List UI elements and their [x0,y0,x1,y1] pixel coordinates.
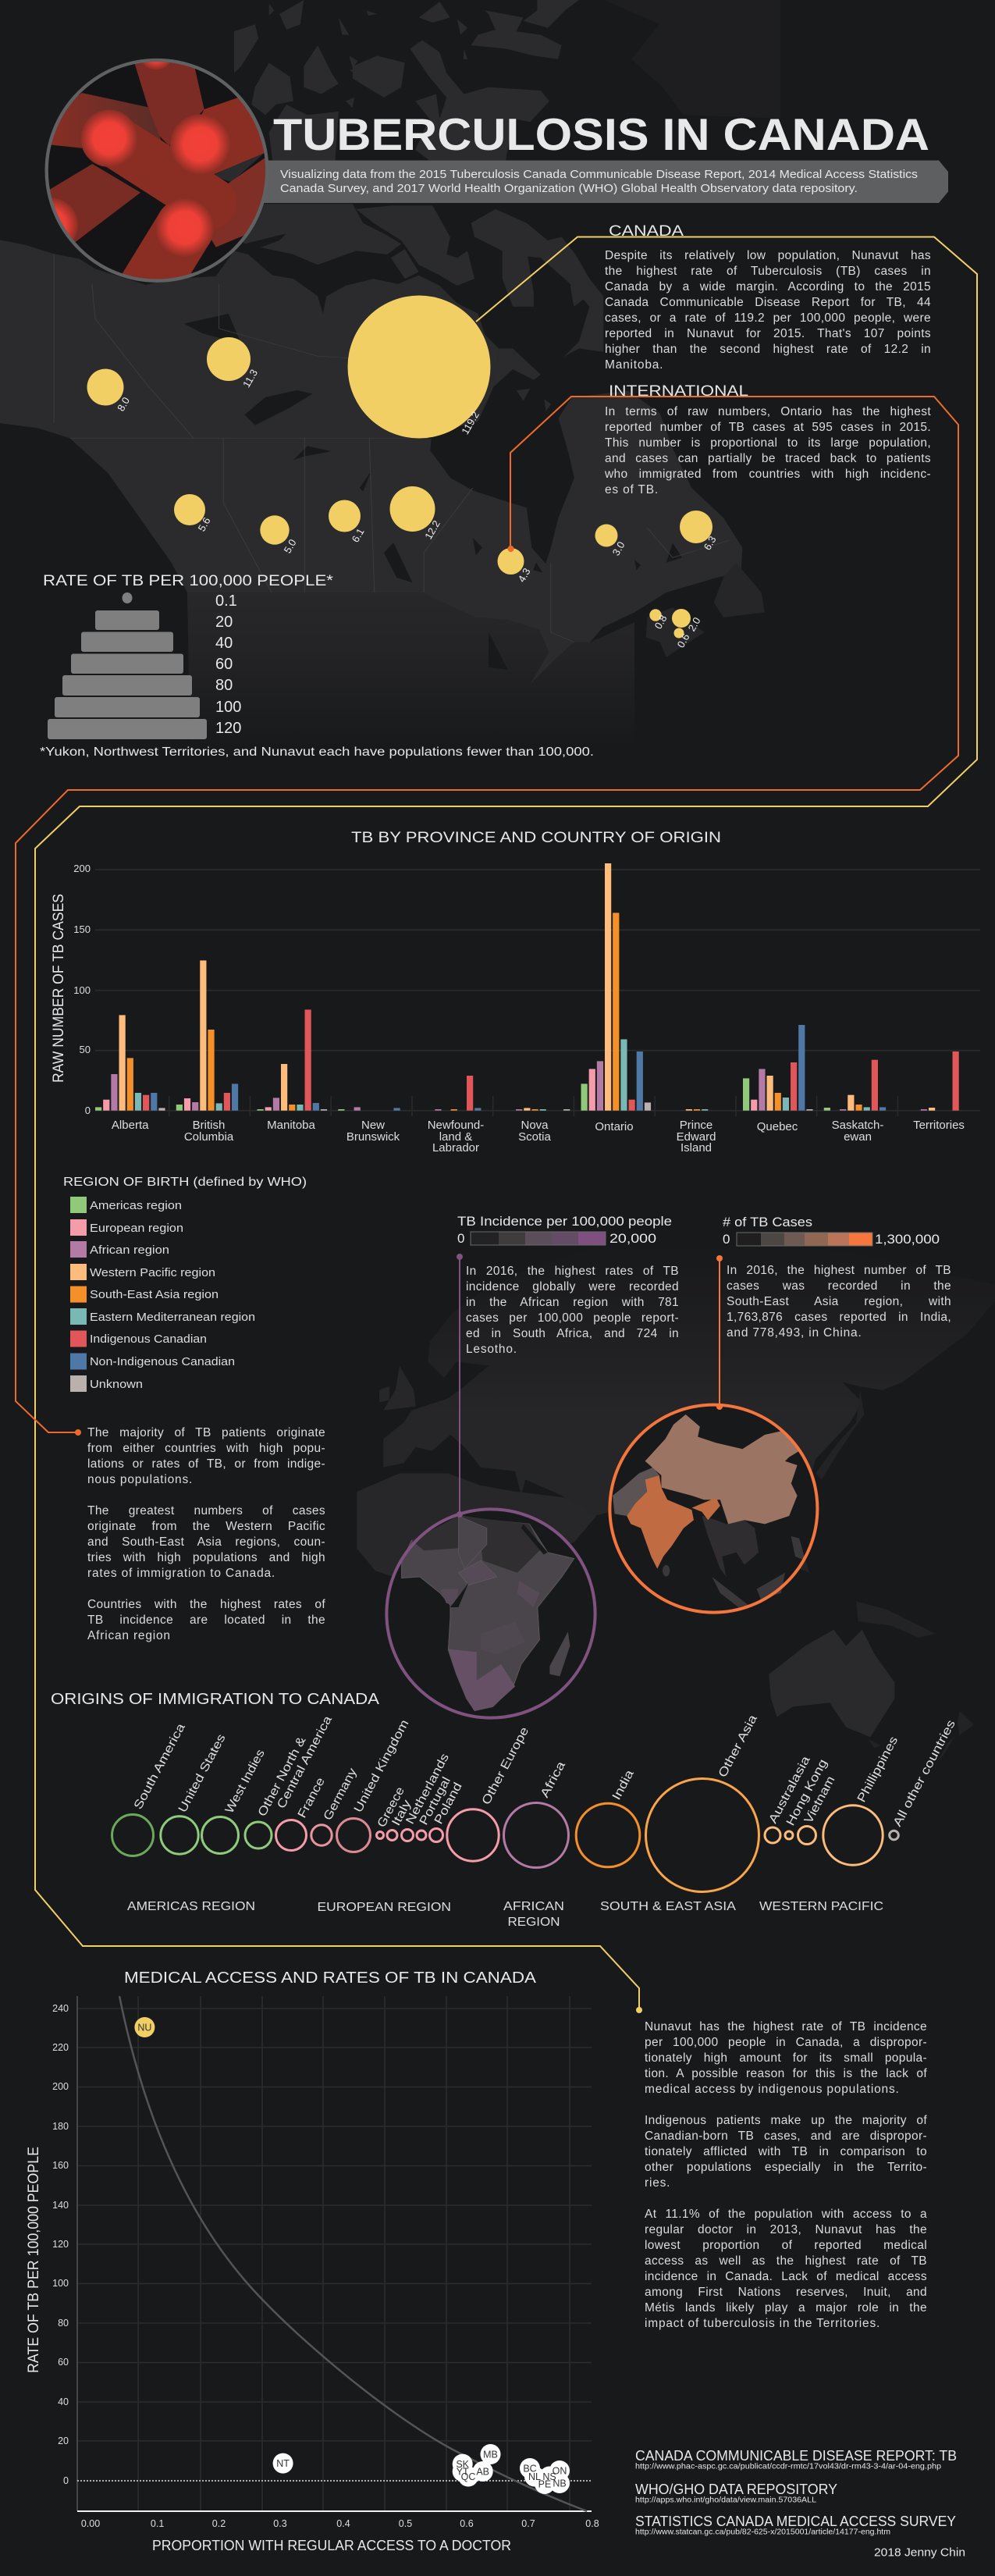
data points: MB [483,2450,498,2460]
text block: Nunavut medical access: tionately afflicted with TB in comparison to [645,2145,927,2158]
text block: global cases [727,1264,951,1340]
legend: region of birth: Non-Indigenous Canadian [90,1356,235,1368]
rotated country labels: Phillippines [855,1735,901,1805]
text block: Canada: Canada Communicable Disease Report for TB, 44 [605,296,931,309]
rotated country labels: Other Asia [716,1713,760,1780]
banner: subtitle: Canada Survey, and 2017 World Health Organization (WHO) Global Health Observatory data repository. [280,183,858,195]
text block: global cases: and 778,493, in China. [727,1326,862,1340]
legend: rate of TB: 100 [215,699,241,716]
text block: global incidence [466,1265,679,1356]
text block: TB patient origins: rates of immigration to Canada. [87,1567,275,1580]
references: http://www.phac-aspc.gc.ca/publicat/ccdr-rmtc/17vol43/dr-rm43-3-4/ar-04-eng.php [635,2462,941,2471]
rotated country labels: Poland [432,1781,465,1827]
scatter chart: medical access vs TB rate: 0.6 [460,2518,474,2529]
text block: global incidence: Lesotho. [466,1343,517,1356]
province labels [112,1119,965,1155]
chart title: TB by province: TB BY PROVINCE AND COUNTRY OF ORIGIN [351,830,721,846]
background map: world [357,1232,995,1762]
y axis title: RAW NUMBER OF TB CASES [51,894,67,1083]
province labels: ewan [844,1130,872,1144]
rotated country labels: Central America [275,1713,335,1811]
legend: region of birth: REGION OF BIRTH (defined by WHO) [63,1176,307,1189]
region labels: SOUTH & EAST ASIA [600,1900,736,1913]
data points: NL [528,2471,541,2482]
legend: number of TB cases scale: 1,300,000 [875,1232,940,1247]
map bubbles: TB rate by province: 11.3 [240,367,260,390]
map bubbles: TB rate by province: 119.2 [459,409,482,436]
text block: Nunavut medical access: tion. A possible reason for this is the lack of [645,2067,927,2080]
text block: TB patient origins: TB incidence are located in the [87,1614,325,1627]
text block: TB patient origins: African region [87,1629,171,1642]
text block: Canada: the highest rate of Tuberculosis (TB) cases in [605,265,931,278]
scatter chart: medical access vs TB rate: 240 [52,2003,69,2014]
text block: global incidence: incidence globally were recorded [466,1280,679,1293]
bars: Manitoba [258,1009,327,1111]
legend: TB incidence scale: 20,000 [609,1231,656,1246]
legend: region of birth: African region [90,1244,169,1257]
heading: International: INTERNATIONAL [609,383,748,400]
bubble chart: origins of immigration [112,1778,898,1892]
rotated country labels: Germany [322,1766,360,1823]
data points: NT [276,2458,290,2469]
legend: rate of TB: 60 [215,656,233,673]
rotated country labels: Hong Kong [784,1757,830,1828]
data points: BC [523,2464,537,2475]
text block: Nunavut medical access: lowest proportion of reported medical [645,2239,927,2252]
province labels: Newfound- [428,1119,484,1132]
legend: rate of TB: RATE OF TB PER 100,000 PEOPLE* [43,572,333,589]
scatter chart: medical access vs TB rate: 40 [58,2396,69,2407]
map bubbles: TB rate by province: 5.0 [282,537,299,555]
references: WHO/GHO DATA REPOSITORY [635,2482,837,2497]
references: CANADA COMMUNICABLE DISEASE REPORT: TB [635,2448,957,2464]
title: TUBERCULOSIS IN CANADA [273,110,929,160]
text block: Canada: Canada by a wide margin. According to the 2015 [605,280,931,294]
rotated country labels: Netherlands [403,1751,452,1827]
text block: Nunavut medical access [645,2020,927,2330]
data points: YT [457,2467,469,2478]
text block: TB patient origins: from either countries with high popu- [87,1442,325,1455]
rotated country labels: India [610,1767,637,1802]
bars: Newfoundland and Labrador [435,1076,481,1111]
text block: Nunavut medical access: other populations especially in the Territo- [645,2161,927,2174]
bars: British Columbia [176,960,238,1111]
map bubbles: TB rate by province: 3.0 [610,539,627,557]
scatter chart: medical access vs TB rate: 0.3 [273,2518,287,2529]
legend: region of birth: Americas region [90,1200,182,1212]
text block: global incidence: In 2016, the highest rates of TB [466,1265,679,1278]
text block: Nunavut medical access: per 100,000 people in Canada, a dispropor- [645,2036,927,2049]
scatter chart: medical access vs TB rate: 0 [63,2475,69,2486]
text block: TB patient origins: lations or rates of TB, or from indige- [87,1457,325,1471]
map bubbles: TB rate by province: 0.6 [675,632,692,649]
map bubbles: TB rate by province: 0.8 [652,613,670,631]
text block: global incidence: cases per 100,000 people report- [466,1311,679,1325]
text block: TB patient origins: nous populations. [87,1473,193,1486]
legend: number of TB cases scale: # of TB Cases [723,1215,812,1229]
province labels: Brunswick [346,1130,400,1144]
bars: New Brunswick [338,1107,400,1111]
rotated country labels: Greece [375,1784,407,1830]
map bubbles: TB rate by province [87,295,719,649]
rotated country labels: Vietnam [802,1774,838,1826]
text block: Canada: higher than the second highest rate of 12.2 in [605,343,931,356]
text block: Nunavut medical access: ries. [645,2176,670,2190]
bars: Alberta [95,1015,165,1111]
text block: TB patient origins: tries with high populations and high [87,1551,325,1564]
region labels: AMERICAS REGION [127,1900,255,1913]
text block: International: who immigrated from countries with high incidenc- [605,468,931,481]
connector: international callout line [16,397,958,1432]
text block: global cases: cases was recorded in the [727,1279,951,1293]
icon: tuberculosis bacteria in magnifier circle [45,58,268,283]
rotated country labels: All other countries [891,1717,958,1829]
text block: Canada: Despite its relatively low population, Nunavut has [605,249,931,262]
rotated country labels: United States [176,1732,229,1815]
text block: Nunavut medical access: medical access by indigenous populations. [645,2083,900,2096]
region labels: EUROPEAN REGION [317,1901,451,1914]
scatter chart: medical access vs TB rate: 0.8 [585,2518,599,2529]
rotated country labels: West Indies [223,1747,268,1816]
province labels: Quebec [757,1120,798,1133]
rotated country labels [132,1713,958,1830]
scatter chart: medical access vs TB rate: 0.1 [151,2518,164,2529]
region labels: WESTERN PACIFIC [759,1900,883,1913]
map bubbles: TB rate by province: 5.6 [196,515,213,533]
bar chart: TB by province and origin: 100 [73,984,91,996]
pin: cases callout [716,1255,723,1410]
text block: Nunavut medical access: Nunavut has the highest rate of TB incidence [645,2020,927,2033]
credit: 2018 Jenny Chin [874,2546,965,2559]
rotated country labels: Portugal [418,1775,453,1827]
text block: TB patient origins [87,1426,325,1642]
data points: NB [553,2478,567,2489]
marker: left text pin [75,1429,81,1436]
heading: Canada: CANADA [609,223,684,240]
scatter chart: medical access vs TB rate: 200 [52,2081,69,2092]
legend: number of TB cases scale: 0 [723,1232,730,1247]
map circle: African region [386,1509,595,1718]
data points: NS [542,2471,556,2482]
map bubbles: TB rate by province: 12.2 [422,518,442,541]
y axis title: RATE OF TB PER 100,000 PEOPLE [26,2147,42,2373]
data points: NU [137,2022,151,2033]
province labels: British [193,1119,225,1132]
scatter chart: medical access vs TB rate: 160 [52,2160,69,2171]
data points: PE [538,2479,551,2490]
map circle: South-East Asia region [609,1405,817,1613]
text block: International: and cases can partially be traced back to patients [605,452,931,465]
scatter chart: medical access vs TB rate: 100 [52,2278,69,2289]
text block: International: es of TB. [605,483,659,496]
heading: medical access: MEDICAL ACCESS AND RATES OF TB IN CANADA [124,1969,537,1987]
rotated country labels: Other Europe [480,1725,531,1807]
bar chart: TB by province and origin: 200 [73,863,91,874]
province labels: Scotia [518,1130,551,1144]
text block: Nunavut medical access: access as well as the highest rate of TB [645,2254,927,2268]
legend: region of birth: Indigenous Canadian [90,1333,207,1346]
province labels: New [361,1119,385,1132]
region labels: AFRICAN [503,1900,564,1913]
legend: TB incidence scale [457,1215,672,1246]
rotated country labels: Australasia [766,1754,813,1826]
province labels: Island [681,1141,712,1155]
scatter chart: medical access vs TB rate: 0.7 [521,2518,535,2529]
legend: TB incidence scale: TB Incidence per 100,000 people [457,1215,672,1229]
text block: TB patient origins: Countries with the highest rates of [87,1598,325,1611]
region labels: REGION [507,1916,560,1929]
bars: Ontario [581,863,651,1111]
pin: incidence callout [457,1254,463,1517]
legend: rate of TB: 80 [215,677,233,694]
province labels: Labrador [432,1141,479,1155]
banner: subtitle [250,161,948,203]
text block: International: This number is proportional to its large population, [605,436,931,450]
text block: Nunavut medical access: impact of tuberculosis in the Territories. [645,2317,880,2330]
text block: Nunavut medical access: Canadian-born TB cases, and are dispropor- [645,2129,927,2143]
data points [134,2017,570,2494]
province labels: Prince [680,1119,712,1132]
references: http://www.statcan.gc.ca/pub/82-625-x/2015001/article/14177-eng.htm [635,2528,890,2537]
heading: origins of immigration: ORIGINS OF IMMIGRATION TO CANADA [51,1691,380,1708]
text block: Nunavut medical access: Métis lands likely play a major role in the [645,2301,927,2314]
text block: TB patient origins: The greatest numbers of cases [87,1504,325,1517]
map bubbles: TB rate by province: 8.0 [115,395,132,413]
province labels: Edward [677,1130,716,1144]
data points: ON [553,2465,567,2476]
text block: TB patient origins: originate from the Western Pacific [87,1520,325,1533]
province labels: Saskatch- [832,1119,883,1132]
text block: International: In terms of raw numbers, Ontario has the highest [605,405,931,418]
province labels: Alberta [112,1119,149,1132]
scatter chart: medical access vs TB rate: 120 [52,2239,69,2250]
legend: rate of TB: 120 [215,720,241,737]
rotated country labels: South America [132,1721,188,1812]
map bubbles: TB rate by province: 6.1 [350,526,367,544]
bar chart: TB by province and origin [51,863,980,1155]
data points: QC [461,2471,475,2482]
bars: Nova Scotia [516,1108,570,1111]
text block: Nunavut medical access: tionately high amount for its small popula- [645,2051,927,2065]
legend: number of TB cases scale [723,1215,940,1247]
map bubbles: TB rate by province: 4.3 [516,566,533,584]
legend: region of birth: Western Pacific region [90,1267,215,1279]
references: http://apps.who.int/gho/data/view.main.57036ALL [635,2495,816,2504]
rotated country labels: Other North & [256,1734,309,1819]
text block: International: reported number of TB cases at 595 cases in 2015. [605,421,931,434]
province labels: Manitoba [267,1119,316,1132]
text block: global cases: In 2016, the highest number of TB [727,1264,951,1277]
legend: region of birth: South-East Asia region [90,1289,219,1301]
province labels: Nova [521,1119,549,1132]
rotated country labels: United Kingdom [352,1717,412,1815]
text block: Nunavut medical access: regular doctor in 2013, Nunavut has the [645,2223,927,2236]
rotated country labels: France [296,1775,328,1820]
pin: medical access callout [636,2007,642,2013]
scatter chart: medical access vs TB rate: 60 [58,2357,69,2368]
legend: region of birth: Eastern Mediterranean region [90,1311,255,1324]
legend: rate of TB: 40 [215,635,233,652]
connector: Canada callout line [35,237,977,2010]
text block: TB patient origins: The majority of TB patients originate [87,1426,325,1439]
region labels [127,1900,883,1929]
text block: global cases: South-East Asia region, with [727,1295,951,1308]
rotated country labels: Italy [389,1798,414,1828]
data points: AB [476,2467,489,2478]
rotated country labels: Africa [538,1759,568,1800]
scatter chart: medical access vs TB rate: 20 [58,2435,69,2446]
scatter chart: medical access vs TB rate: 220 [52,2042,69,2053]
background map: Canada [0,0,780,747]
x axis title: PROPORTION WITH REGULAR ACCESS TO A DOCTOR [152,2538,511,2553]
bars: Territories [921,1051,959,1111]
province labels: Columbia [184,1130,234,1144]
bars: Prince Edward Island [686,1109,708,1111]
scatter chart: medical access vs TB rate: 0.00 [81,2518,100,2529]
footnote: *Yukon, Northwest Territories, and Nunavut each have populations fewer than 100,000. [40,745,594,759]
bars: Saskatchewan [824,1060,886,1111]
references: STATISTICS CANADA MEDICAL ACCESS SURVEY [635,2514,956,2529]
scatter chart: medical access vs TB rate [26,1996,599,2553]
text block: global incidence: ed in South Africa, and 724 in [466,1327,679,1340]
text block: Canada: cases, or a rate of 119.2 per 100,000 people, were [605,311,931,325]
province labels: Territories [913,1119,965,1132]
legend: region of birth: Unknown [90,1379,143,1391]
text block: Nunavut medical access: incidence in Canada. Lack of medical access [645,2270,927,2283]
scatter chart: medical access vs TB rate: 0.4 [336,2518,350,2529]
bars: Quebec [743,1025,813,1111]
bar chart: TB by province and origin: 150 [73,923,91,935]
scatter chart: medical access vs TB rate: 180 [52,2121,69,2132]
text block: TB patient origins: and South-East Asia regions, coun- [87,1535,325,1549]
data points: SK [456,2459,470,2470]
province labels: land & [439,1130,472,1144]
legend: rate of TB: 0.1 [215,592,237,610]
text block: Nunavut medical access: At 11.1% of the population with access to a [645,2208,927,2221]
text block: Canada: reported in Nunavut for 2015. That's 107 points [605,327,931,340]
bar chart: TB by province and origin: 0 [85,1105,91,1116]
legend: rate of TB: 20 [215,614,233,631]
scatter chart: medical access vs TB rate: 0.2 [212,2518,226,2529]
legend: region of birth: European region [90,1222,183,1235]
text block: Canada [605,249,931,372]
banner: subtitle: Visualizing data from the 2015 Tuberculosis Canada Communicable Disease Report, 2014 Medical Access Statistics [280,169,918,181]
map bubbles: TB rate by province: 2.0 [686,615,703,633]
province labels: Ontario [595,1120,634,1133]
legend: rate of TB [43,572,333,739]
text block: Nunavut medical access: among First Nations reserves, Inuit, and [645,2286,927,2299]
scatter chart: medical access vs TB rate: 80 [58,2318,69,2329]
text block: global cases: 1,763,876 cases reported in India, [727,1311,951,1324]
map bubbles: TB rate by province: 6.3 [702,534,719,552]
text block: Canada: Manitoba. [605,358,663,372]
references [635,2448,957,2537]
scatter chart: medical access vs TB rate: 140 [52,2200,69,2211]
text block: International [605,405,931,496]
text block: global incidence: in the African region with 781 [466,1296,679,1309]
legend: region of birth [63,1176,307,1392]
scatter chart: medical access vs TB rate: 0.5 [399,2518,412,2529]
legend: TB incidence scale: 0 [457,1231,464,1246]
text block: Nunavut medical access: Indigenous patients make up the majority of [645,2114,927,2127]
bar chart: TB by province and origin: 50 [80,1044,91,1055]
